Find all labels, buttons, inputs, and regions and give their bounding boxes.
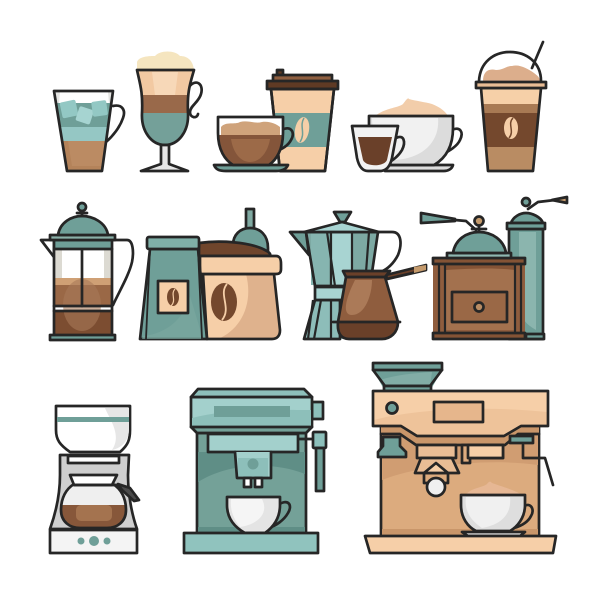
icon: teal espresso machine: [184, 389, 326, 553]
icon: beige espresso machine with grinder: [365, 363, 556, 553]
icon: layered latte goblet: [137, 52, 202, 171]
icon: coffee sack with scoop: [199, 209, 281, 339]
icon: coffee grinder: [421, 197, 567, 339]
icon: take-away cup: [267, 70, 338, 171]
icon: drip coffee maker: [50, 406, 139, 553]
icon: turkish cezve: [333, 265, 426, 339]
icon: coffee bag with label: [140, 237, 207, 339]
icon: coffee cup on saucer: [214, 117, 293, 171]
icon: french press: [41, 203, 133, 340]
icon: frappe cup with dome: [476, 42, 546, 171]
icon: iced latte glass: [54, 91, 124, 171]
icon: moka pot: [290, 212, 400, 339]
icon: cappuccino cup with foam: [352, 98, 462, 171]
